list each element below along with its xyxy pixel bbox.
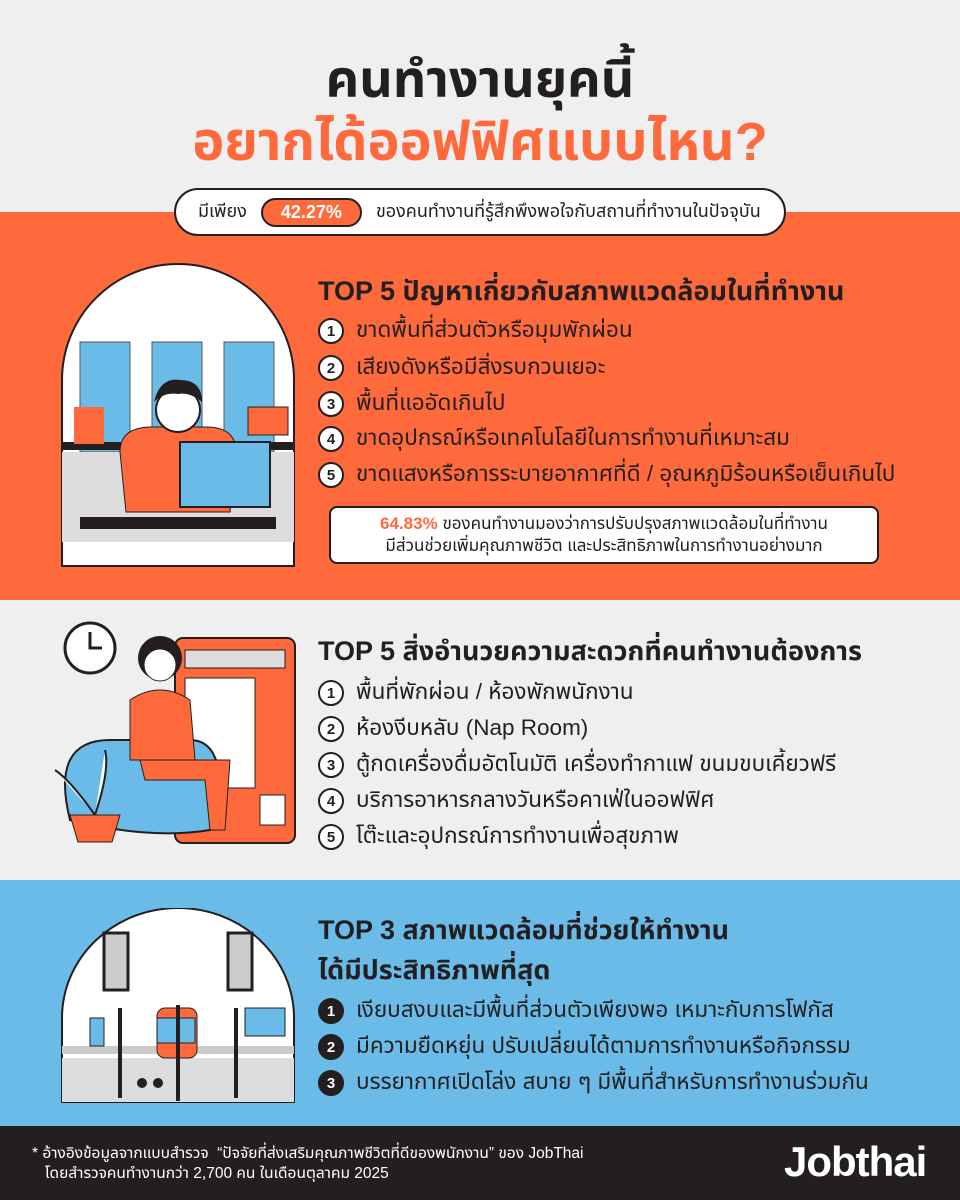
heading: top 3: TOP 3 สภาพแวดล้อมที่ช่วยให้ทำงาน	[318, 915, 729, 945]
footer	[0, 1126, 960, 1200]
list item 3	[318, 387, 506, 417]
heading: top 3	[318, 911, 729, 986]
list item 1: 1	[327, 684, 335, 702]
callout: 64.83%: 64.83% ของคนทำงานมองว่าการปรับปรุงสภาพแวดล้อมในที่ทำงาน	[380, 514, 828, 533]
callout: 64.83%: มีส่วนช่วยเพิ่มคุณภาพชีวิต และประสิทธิภาพในการทำงานอย่างมาก	[385, 536, 823, 555]
list item 4: 4	[327, 430, 335, 448]
list item 3: ตู้กดเครื่องดื่มอัตโนมัติ เครื่องทำกาแฟ ขนมขบเคี้ยวฟรี	[356, 751, 836, 776]
list item 3: 3	[327, 756, 335, 774]
list item 5: โต๊ะและอุปกรณ์การทำงานเพื่อสุขภาพ	[356, 823, 679, 848]
logo: JobThai: Jobthai	[784, 1138, 926, 1185]
stat pill	[174, 188, 786, 236]
list item 1: 1	[327, 322, 335, 340]
list item 4: 4	[327, 792, 335, 810]
panel: amenities	[318, 632, 862, 850]
panel: problems	[318, 272, 895, 488]
panel: top 3	[318, 911, 869, 1096]
title: คนทำงานยุคนี้	[326, 51, 634, 109]
heading: top 5 amenities: TOP 5 สิ่งอำนวยความสะดวกที่คนทำงานต้องการ	[318, 636, 862, 666]
list item 3: พื้นที่แออัดเกินไป	[356, 390, 506, 415]
footnote: โดยสำรวจคนทำงานกว่า 2,700 คน ในเดือนตุลาคม 2025	[45, 1165, 389, 1182]
list item 5: 5	[327, 828, 335, 846]
list item 1: ขาดพื้นที่ส่วนตัวหรือมุมพักผ่อน	[356, 317, 633, 342]
callout: 64.83%	[329, 506, 879, 564]
list item 2: เสียงดังหรือมีสิ่งรบกวนเยอะ	[356, 354, 605, 379]
list item 2: 2	[327, 720, 335, 738]
illustration: open office	[61, 908, 295, 1103]
list item 1: เงียบสงบและมีพื้นที่ส่วนตัวเพียงพอ เหมาะกับการโฟกัส	[356, 997, 834, 1022]
list item 2: มีความยืดหยุ่น ปรับเปลี่ยนได้ตามการทำงานหรือกิจกรรม	[356, 1033, 851, 1058]
list item 2: 2	[327, 1038, 335, 1056]
list item 4: ขาดอุปกรณ์หรือเทคโนโลยีในการทำงานที่เหมาะสม	[356, 425, 790, 450]
list item 5: 5	[327, 466, 335, 484]
title: อยากได้ออฟฟิศแบบไหน?	[192, 112, 768, 172]
list item 3: 3	[327, 1074, 335, 1092]
footnote: * อ้างอิงข้อมูลจากแบบสำรวจ “ปัจจัยที่ส่งเสริมคุณภาพชีวิตที่ดีของพนักงาน” ของ JobThai	[32, 1145, 583, 1162]
list item 5: ขาดแสงหรือการระบายอากาศที่ดี / อุณหภูมิร้อนหรือเย็นเกินไป	[356, 461, 895, 486]
stat pill: มีเพียง	[198, 200, 247, 220]
list item 1: พื้นที่พักผ่อน / ห้องพักพนักงาน	[356, 679, 634, 704]
footnote	[32, 1142, 583, 1182]
stat pill: ของคนทำงานที่รู้สึกพึงพอใจกับสถานที่ทำงานในปัจจุบัน	[376, 200, 761, 220]
illustration: stressed worker	[61, 263, 295, 567]
section backgrounds	[0, 212, 960, 600]
title	[192, 43, 768, 172]
list item 2: ห้องงีบหลับ (Nap Room)	[356, 715, 588, 740]
list item 4: บริการอาหารกลางวันหรือคาเฟ่ในออฟฟิศ	[356, 787, 714, 812]
list item 3: 3	[327, 396, 335, 412]
list item 2: 2	[327, 360, 335, 376]
list item 3: บรรยากาศเปิดโล่ง สบาย ๆ มีพื้นที่สำหรับการทำงานร่วมกัน	[356, 1069, 869, 1094]
list item 1: 1	[327, 1002, 335, 1020]
illustration: relaxing woman	[54, 622, 296, 844]
heading: top 5 problems: TOP 5 ปัญหาเกี่ยวกับสภาพแวดล้อมในที่ทำงาน	[318, 276, 844, 306]
stat pill: 42.27%	[281, 202, 342, 222]
heading: top 3: ได้มีประสิทธิภาพที่สุด	[318, 955, 551, 985]
